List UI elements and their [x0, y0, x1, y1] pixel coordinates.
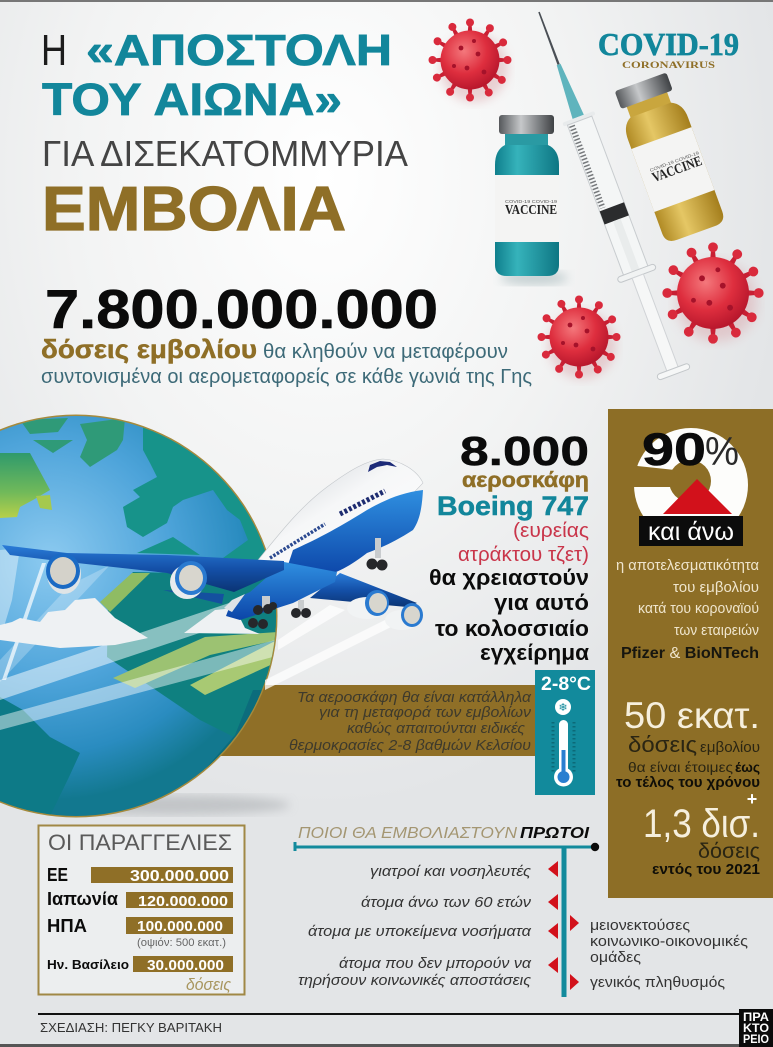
efficacy text: Pfizer & BioNTech [621, 645, 759, 662]
panel: orders: ΟΙ ΠΑΡΑΓΓΕΛΙΕΣ [48, 830, 232, 855]
continent: greenland area [80, 418, 125, 467]
headline number: 7.800.000.000 [45, 278, 438, 340]
thermometer box: ❄ [558, 702, 568, 714]
gold band: temperature note: θερμοκρασίες 2-8 βαθμών Κελσίου [289, 738, 531, 754]
continent: south [0, 697, 80, 816]
left wing [2, 545, 284, 592]
title: «ΑΠΟΣΤΟΛΗ [86, 26, 392, 75]
chart: 90 percent ring [628, 424, 748, 546]
heading [298, 825, 590, 842]
thermometer box [535, 670, 595, 795]
doses timeline text: εντός του 2021 [652, 862, 760, 878]
red markers left [548, 861, 558, 973]
continent: africa stripes [107, 572, 276, 738]
right group: μειονεκτούσες [590, 917, 690, 934]
efficacy text: των εταιρειών [674, 622, 759, 639]
chart: 90 percent ring: % [705, 430, 739, 474]
right group: κοινωνικο-οικονομικές [590, 933, 748, 950]
vial: teal vaccine [495, 115, 568, 285]
doses text: δόσεις εμβολίου [41, 334, 257, 364]
soft shadow under globe [50, 795, 290, 815]
chart: 90 percent ring: 90 [642, 424, 706, 475]
left group: άτομα που δεν μπορούν να [339, 955, 531, 972]
chart: 90 percent ring: και άνω [648, 518, 734, 546]
continent: north america [0, 453, 50, 518]
syringe [520, 5, 693, 381]
virus right [662, 242, 764, 344]
logo: ΠΡΑ [743, 1010, 769, 1024]
doses timeline text: εμβολίου [700, 739, 760, 756]
8.000 aircraft text: εγχείρημα [480, 640, 589, 665]
title: Η [41, 26, 67, 75]
gold band: temperature note: καθώς απαιτούνται ειδικές [347, 721, 526, 737]
gold band: temperature note: για τη μεταφορά των εμβολίων [319, 705, 532, 721]
doses text [41, 334, 532, 388]
vial: yellow vaccine: COVID-19 COVID-19 [649, 150, 700, 173]
engine 4 [385, 603, 423, 630]
airplane [2, 459, 423, 630]
doses timeline text: 1,3 δισ. [643, 802, 760, 846]
vial: yellow vaccine: VACCINE [650, 154, 704, 186]
order: Japan [47, 889, 233, 910]
order: Japan: 120.000.000 [138, 893, 228, 910]
left group: άτομα άνω των 60 ετών [361, 894, 532, 911]
gold panel: efficacy [608, 409, 773, 898]
doses timeline text: + [747, 789, 757, 809]
covid-19 logo: COVID-19 [598, 26, 739, 62]
rear fuselage [226, 562, 337, 620]
order: Japan: Ιαπωνία [47, 889, 118, 909]
logo [739, 1009, 773, 1047]
doses timeline text: δόσεις [698, 840, 760, 863]
order: EU: 300.000.000 [130, 868, 229, 885]
engine 3 [347, 590, 389, 619]
order: UK [47, 956, 233, 974]
landing gear [248, 538, 388, 629]
red markers right [570, 915, 579, 990]
doses timeline text: 50 εκατ. [624, 695, 760, 736]
engine 2 [170, 561, 207, 599]
order: USA: (οψιόν: 500 εκατ.) [137, 937, 226, 949]
logo: ΡΕΙΟ [743, 1032, 769, 1046]
8.000 aircraft text: 8.000 [460, 428, 589, 474]
virus lower [538, 296, 620, 379]
doses timeline text: θα είναι έτοιμες [628, 759, 733, 775]
efficacy text [616, 557, 759, 662]
heading: ΠΡΩΤΟΙ [520, 825, 590, 842]
vial: teal vaccine: COVID-19 COVID-19 [505, 199, 558, 204]
efficacy text: κατά του κοροναϊού [638, 600, 759, 617]
left group [298, 863, 532, 989]
8.000 aircraft text: θα χρειαστούν [429, 565, 589, 590]
order: USA: ΗΠΑ [47, 916, 87, 936]
vial: teal vaccine: VACCINE [505, 203, 557, 218]
8.000 aircraft text: για αυτό [494, 590, 589, 615]
order: UK: 30.000.000 [147, 958, 224, 974]
panel: orders: δόσεις [186, 975, 232, 994]
priority list [294, 825, 748, 997]
virus top [428, 18, 512, 102]
cockpit [368, 461, 397, 472]
gold band: temperature note: Τα αεροσκάφη θα είναι κατάλληλα [297, 690, 532, 706]
doses timeline text: δόσεις [628, 732, 697, 757]
order: EU: ΕΕ [47, 865, 68, 885]
contrails beyond globe [265, 605, 395, 690]
panel: orders [38, 826, 244, 994]
title: ΤΟΥ ΑΙΩΝΑ» [42, 74, 342, 125]
right group [590, 917, 748, 991]
heading: ΠΟΙΟΙ ΘΑ ΕΜΒΟΛΙΑΣΤΟΥΝ [298, 825, 518, 842]
covid-19 logo: CORONAVIRUS [622, 61, 715, 71]
doses text: συντονισμένα οι αερομεταφορείς σε κάθε γωνιά της Γης [41, 366, 532, 388]
right group: γενικός πληθυσμός [590, 974, 725, 991]
gold band: temperature note [220, 685, 535, 756]
title: ΕΜΒΟΛΙΑ [42, 175, 346, 244]
thermometer box: 2-8°C [541, 674, 591, 695]
credit: ΣΧΕΔΙΑΣΗ: ΠΕΓΚΥ ΒΑΡΙΤΑΚΗ [40, 1020, 222, 1035]
left group: άτομα με υποκείμενα νοσήματα [308, 923, 531, 940]
right group: ομάδες [590, 949, 641, 966]
efficacy text: η αποτελεσματικότητα [616, 557, 759, 574]
doses timeline text [616, 695, 760, 878]
continent: north africa [137, 537, 200, 555]
order: USA [47, 916, 233, 949]
fuselage [258, 459, 423, 565]
contrails [0, 603, 229, 700]
8.000 aircraft text: ατράκτου τζετ) [458, 544, 589, 566]
title: ΓΙΑ ΔΙΣΕΚΑΤΟΜΜΥΡΙΑ [42, 133, 408, 174]
engine 1 [46, 553, 81, 594]
order: EU [47, 865, 233, 885]
logo: ΚΤΟ [743, 1021, 769, 1035]
8.000 aircraft text: το κολοσσιαίο [435, 616, 589, 641]
doses timeline text: έως [735, 759, 760, 775]
left group: γιατροί και νοσηλευτές [370, 863, 532, 880]
order: USA: 100.000.000 [137, 919, 223, 935]
doses timeline text: το τέλος του χρόνου [616, 775, 760, 791]
right wing [310, 573, 417, 607]
left group: τηρήσουν κοινωνικές αποστάσεις [298, 972, 532, 989]
timeline axis [294, 842, 599, 997]
doses text: θα κληθούν να μεταφέρουν [263, 341, 508, 363]
continent: eurasia [123, 428, 265, 560]
order: UK: Ην. Βασίλειο [47, 957, 129, 972]
8.000 aircraft text [429, 428, 589, 665]
vial: yellow vaccine [611, 71, 726, 244]
globe [0, 410, 280, 818]
title [41, 26, 408, 244]
windows [340, 491, 385, 514]
clouds [0, 598, 260, 648]
8.000 aircraft text: Boeing 747 [437, 491, 589, 521]
8.000 aircraft text: αεροσκάφη [462, 469, 589, 492]
efficacy text: του εμβολίου [673, 579, 759, 596]
8.000 aircraft text: (ευρείας [513, 520, 589, 542]
tailplane [163, 590, 224, 604]
